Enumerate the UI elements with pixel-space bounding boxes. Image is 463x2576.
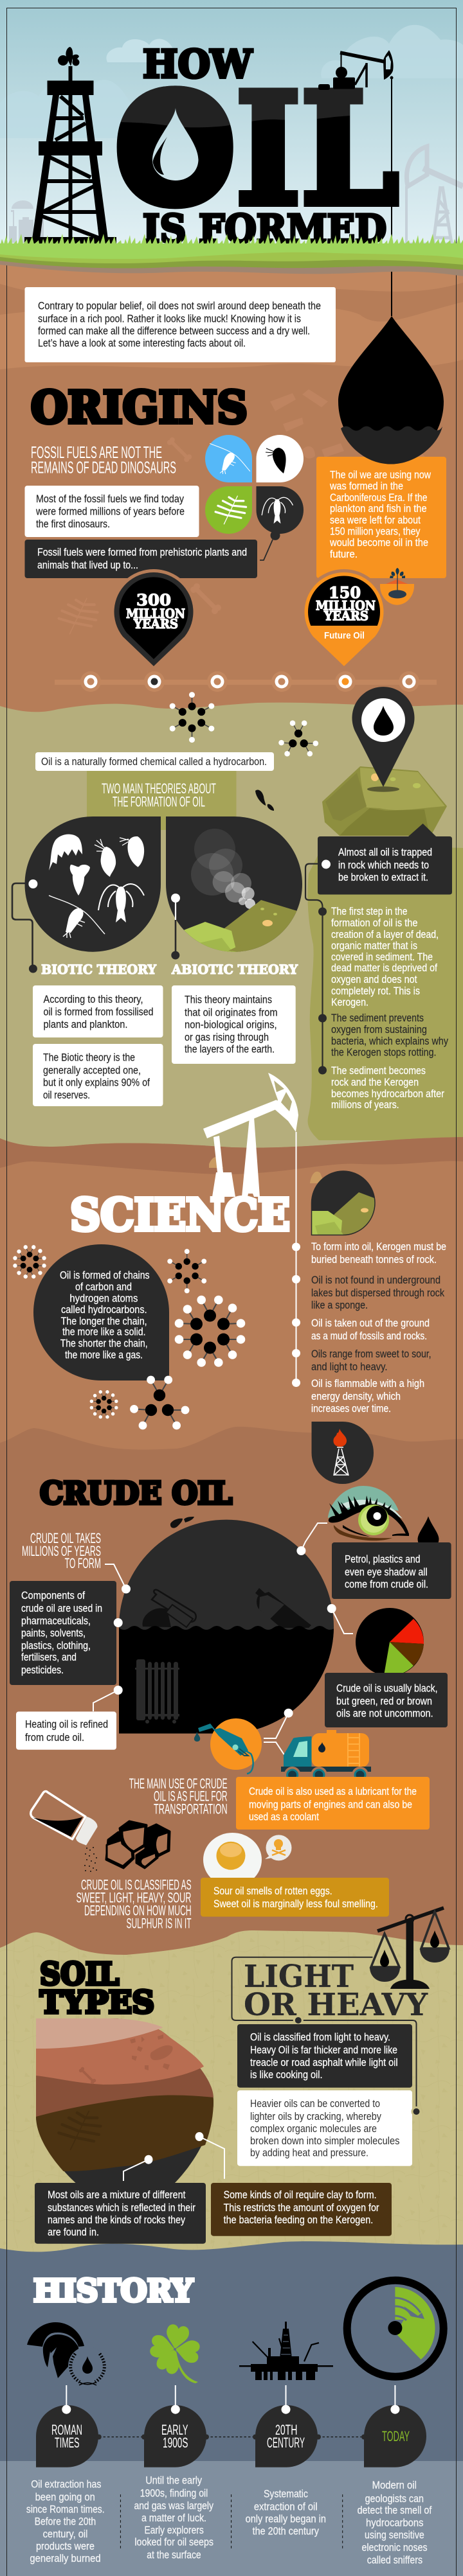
heading: crude oil classified: CRUDE OIL IS CLASSIFIED AS	[81, 1877, 192, 1892]
callout: trapped in rock	[318, 824, 452, 894]
heading: Science: SCIENCE	[70, 1190, 290, 1241]
text: 20th century	[246, 2489, 326, 2537]
heading band: two main theories: TWO MAIN THEORIES ABOUT	[102, 781, 216, 797]
icon: pump jack on title	[318, 50, 394, 316]
icon: large oil drop	[338, 316, 444, 464]
subheading: fossil fuels: FOSSIL FUELS ARE NOT THE	[31, 443, 162, 462]
panel: chains of carbon teardrop: The shorter the chain,	[60, 1338, 148, 1350]
panel: chains of carbon teardrop: Oil is formed of chains	[60, 1270, 150, 1282]
text: today: hydrocarbons	[366, 2518, 423, 2529]
timeline: million years	[55, 671, 437, 692]
text: today: geologists can	[365, 2493, 424, 2505]
icon: white pump jack	[203, 1073, 298, 1384]
pin: 300 million years: 300	[136, 591, 171, 609]
small rocks in soil	[209, 1157, 324, 1183]
connector dot: heading to box	[294, 2016, 302, 2025]
hydrocarbon callout: Oil is a naturally formed chemical called a hydrocarbon.	[41, 756, 267, 768]
panel: chains of carbon teardrop: hydrogen atoms	[69, 1293, 138, 1305]
subheading: fossil fuels	[31, 443, 176, 477]
subheading: fossil fuels: REMAINS OF DEAD DINOSAURS	[31, 458, 176, 477]
text box: biotic accepted: The Biotic theory is the	[43, 1052, 135, 1064]
panel: abiotic theory illustration	[166, 816, 304, 957]
icon: skull speech bubble	[265, 1835, 292, 1860]
text: early 1900s: and gas was largely	[134, 2500, 214, 2512]
connector: formation steps	[305, 860, 331, 1074]
background pump jack silhouette	[399, 146, 463, 244]
chart: soil layers drop	[36, 2018, 213, 2184]
pin: oil drop location	[352, 687, 415, 787]
panel: 20th century: 20TH	[275, 2422, 297, 2438]
icon: oil splash on crude	[170, 1517, 194, 1528]
heading band: two main theories	[87, 768, 237, 830]
connector: eye	[296, 1523, 327, 1555]
text box: biotic accepted: oil reserves.	[43, 1090, 90, 1101]
text box: light to heavy	[237, 2024, 412, 2088]
text box: cracking	[237, 2090, 412, 2166]
text: early 1900s: at the surface	[147, 2550, 201, 2561]
icon: radar	[347, 2280, 444, 2377]
heading: crude oil classified: DEPENDING ON HOW MUCH	[84, 1903, 192, 1919]
bracket line: light or heavy	[232, 1957, 417, 2112]
connector: mixture	[123, 2155, 153, 2181]
panel: chains of carbon teardrop: called hydrocarbons.	[61, 1304, 147, 1316]
panel: chains of carbon teardrop	[33, 1244, 169, 1381]
text box: components	[10, 1581, 116, 1685]
timeline: science facts: buried beneath tonnes of rock.	[311, 1254, 437, 1266]
timeline: science facts: Oil is flammable with a high	[311, 1378, 424, 1389]
panel: orange carboniferous note: was formed in the	[329, 481, 403, 492]
pin: 150 million years future oil	[304, 572, 383, 666]
text box: heating oil: from crude oil.	[25, 1732, 84, 1743]
text: today: detect the smell of	[358, 2505, 432, 2516]
text box: biotic accepted	[33, 1044, 163, 1106]
heading: main use: THE MAIN USE OF CRUDE	[129, 1776, 228, 1792]
text box: components: paints, solvents,	[21, 1628, 86, 1639]
text: formation steps: organic matter that is	[331, 940, 417, 952]
text box: sour oil: Sweet oil is marginally less foul smelling.	[213, 1898, 378, 1910]
panel: 20th century: CENTURY	[267, 2435, 305, 2451]
icon: flame rig teardrop	[311, 1422, 374, 1484]
text box: most fossil fuels: were formed millions of years before	[35, 506, 185, 518]
text: early 1900s	[134, 2475, 214, 2561]
panel: Roman times	[36, 2385, 98, 2467]
text: today: called sniffers	[367, 2555, 422, 2566]
text box: clay: the bacteria feeding on the Kerogen.	[224, 2214, 373, 2226]
connector: petals to box	[260, 531, 280, 560]
text box: light to heavy: treacle or road asphalt while light oil	[250, 2057, 398, 2069]
heading: crude oil takes millions: CRUDE OIL TAKES	[30, 1530, 101, 1546]
text box: prehistoric plants: Fossil fuels were formed from prehistoric plants and	[37, 547, 247, 558]
ground: grass layers	[0, 231, 463, 276]
text: formation steps: creation of a layer of dead,	[331, 929, 439, 940]
pin: 150 million years future oil: MILLION	[316, 598, 376, 613]
panel: orange carboniferous note: plankton and fish in the	[330, 503, 427, 515]
pin: 150 million years future oil: 150	[329, 583, 361, 602]
panel: chains of carbon teardrop: of carbon and	[75, 1282, 132, 1293]
heading: biotic and abiotic theory	[41, 962, 298, 977]
text box: light to heavy: is like cooking oil.	[250, 2069, 323, 2081]
text box: biotic theory: oil is formed from fossilised	[44, 1006, 153, 1018]
text box: most fossil fuels: the first dinosaurs.	[36, 518, 110, 530]
text: formation steps: Kerogen.	[331, 997, 368, 1009]
text: 20th century: the 20th century	[253, 2526, 320, 2537]
timeline connectors: history	[96, 2435, 367, 2440]
heading: light or heavy	[244, 1959, 428, 2023]
text: formation steps: The sediment becomes	[331, 1065, 426, 1077]
text: today: electronic noses	[361, 2542, 427, 2554]
text box: light to heavy: Heavy Oil is far thicker and more like	[250, 2045, 397, 2056]
intro text box: surface in a rich pool. Rather it looks like muck! Knowing how it is	[38, 313, 301, 324]
text: formation steps: dead matter is deprived of	[331, 962, 437, 974]
panel: orange carboniferous note: would become oil in the	[329, 537, 428, 549]
heading: light or heavy: LIGHT	[244, 1959, 354, 1995]
text: formation steps: bacteria, which explains why	[331, 1036, 449, 1047]
text: formation steps: millions of years.	[331, 1099, 399, 1111]
text box: most fossil fuels	[24, 486, 199, 537]
text: Roman times: since Roman times.	[26, 2504, 105, 2516]
heading: biotic and abiotic theory: BIOTIC THEORY	[41, 962, 157, 977]
text: early 1900s: looked for oil seeps	[134, 2537, 213, 2548]
text: formation steps: The sediment prevents	[331, 1012, 424, 1024]
text box: clay	[211, 2183, 392, 2236]
text: early 1900s: Until the early	[145, 2475, 203, 2487]
panel: early 1900s	[144, 2385, 206, 2467]
text box: crude colour	[325, 1673, 448, 1727]
icon: rock	[322, 766, 447, 836]
panel: 20th century	[255, 2385, 318, 2467]
text: Roman times: generally burned	[30, 2553, 101, 2564]
text: formation steps: covered in sediment. The	[331, 951, 433, 963]
heading: crude oil takes millions: MILLIONS OF YEARS	[22, 1543, 101, 1559]
intro text box: Let’s have a look at some interesting facts about oil.	[38, 338, 246, 349]
heading: light or heavy: OR HEAVY	[244, 1987, 428, 2023]
text box: petrol plastics: come from crude oil.	[345, 1579, 428, 1591]
icon: oil splash	[255, 790, 274, 811]
intro text box: Contrary to popular belief, oil does not swirl around deep beneath the	[38, 300, 321, 312]
text: Roman times	[26, 2479, 105, 2564]
text box: petrol plastics: Petrol, plastics and	[345, 1553, 421, 1565]
panel: early 1900s: 1900S	[163, 2435, 188, 2451]
chart: crude oil colour pie	[356, 1608, 424, 1676]
text box: biotic accepted: generally accepted one,	[43, 1065, 141, 1077]
timeline: science facts: Oil is not found in underground	[311, 1275, 440, 1286]
panel: orange carboniferous note: future.	[330, 549, 358, 560]
text box: biotic theory: According to this theory,	[44, 994, 143, 1005]
fossil decorations	[59, 389, 440, 634]
heading: Origins: ORIGINS	[31, 382, 248, 434]
panel: orange carboniferous note	[316, 457, 446, 578]
text: early 1900s: Early explorers	[144, 2525, 204, 2536]
text box: components: pesticides.	[21, 1664, 64, 1676]
connector: heating oil	[93, 1686, 123, 1711]
pin: 150 million years future oil: YEARS	[323, 609, 368, 623]
text box: cracking: Heavier oils can be converted to	[250, 2098, 380, 2110]
heading: Crude Oil: CRUDE OIL	[40, 1476, 232, 1512]
timeline: science facts: Oil is taken out of the ground	[311, 1318, 430, 1329]
text box: cracking: complex organic molecules are	[250, 2123, 377, 2135]
icon: tanker truck	[281, 1730, 371, 1783]
icon: offshore rig	[239, 2322, 333, 2380]
connector: abiotic	[171, 894, 180, 960]
text box: abiotic theory: or gas rising through	[185, 1032, 269, 1043]
text box: prehistoric plants	[24, 540, 257, 578]
connector: biotic	[12, 879, 37, 973]
connector: pie	[327, 1604, 353, 1634]
column dividers: history	[120, 2494, 343, 2548]
text: formation steps: becomes hydrocarbon after	[331, 1088, 444, 1100]
pin: 300 million years: YEARS	[133, 617, 178, 631]
text: today: Modern oil	[372, 2480, 417, 2491]
text box: mixture	[35, 2183, 206, 2244]
panel: chains of carbon teardrop: The longer the chain,	[61, 1316, 147, 1327]
text: formation steps: completely rot. This is	[331, 985, 420, 997]
text: today	[358, 2480, 432, 2566]
text: Roman times: products were	[36, 2541, 95, 2552]
text box: abiotic theory: the layers of the earth.	[185, 1044, 275, 1055]
title: How Oil Is Formed: OIL	[114, 60, 399, 240]
text box: lubricant	[236, 1777, 430, 1830]
text box: abiotic theory: This theory maintains	[185, 994, 272, 1006]
text: 20th century: only really began in	[246, 2514, 326, 2525]
text box: sour oil: Sour oil smells of rotten eggs.	[213, 1885, 332, 1897]
icon: roman helmet with wreath	[27, 2322, 107, 2385]
text box: light to heavy: Oil is classified from light to heavy.	[250, 2032, 390, 2043]
panel: orange carboniferous note: 150 million years, they	[330, 525, 421, 537]
text box: biotic theory	[33, 985, 163, 1037]
text box: cracking: by adding heat and pressure.	[250, 2148, 368, 2159]
title: How Oil Is Formed: HOW	[143, 42, 253, 87]
timeline: science facts: Oils range from sweet to sour,	[311, 1348, 431, 1360]
connector dot: components	[114, 1618, 123, 1627]
heading: History: HISTORY	[33, 2273, 194, 2309]
text box: petrol plastics: even eye shadow all	[345, 1566, 428, 1578]
molecule diagrams: hydrocarbon	[170, 692, 318, 757]
timeline: science facts: increases over time.	[311, 1403, 391, 1415]
timeline: science facts: energy density, which	[311, 1391, 401, 1402]
panel: chains of carbon teardrop: the more like a solid.	[62, 1327, 145, 1338]
text box: clay: This restricts the amount of oxygen for	[224, 2202, 379, 2214]
heading band: two main theories: THE FORMATION OF OIL	[113, 794, 205, 809]
intro text box: formed can make all the difference between success and a dry well.	[38, 325, 310, 337]
text box: cracking: lighter oils by cracking, whereby	[250, 2111, 382, 2122]
callout: trapped in rock: Almost all oil is trapped	[338, 847, 432, 858]
heading: main use	[129, 1776, 228, 1817]
text: formation steps: oxygen from sustaining	[331, 1024, 427, 1036]
panel: early 1900s: EARLY	[161, 2422, 188, 2438]
text: formation steps: The first step in the	[331, 906, 408, 917]
heading: crude oil classified: SULPHUR IS IN IT	[126, 1916, 192, 1932]
heading: biotic and abiotic theory: ABIOTIC THEORY	[171, 962, 298, 977]
text box: components: crude oil are used in	[21, 1603, 102, 1614]
panel: crude oil large teardrop	[119, 1520, 335, 1734]
icon: oil derrick	[24, 47, 116, 243]
text box: abiotic theory: that oil originates from	[185, 1007, 278, 1019]
icon: heater	[135, 1659, 179, 1724]
heading: soil types: TYPES	[40, 1985, 154, 2021]
text box: lubricant: moving parts of engines and can also be	[249, 1799, 412, 1810]
text box: mixture: substances which is reflected in their	[48, 2202, 195, 2214]
text box: clay: Some kinds of oil require clay to form.	[224, 2189, 377, 2201]
callout: trapped in rock: be broken to extract it.	[338, 872, 428, 883]
heading: crude oil takes millions: TO FORM	[65, 1555, 101, 1571]
title: How Oil Is Formed: IS FORMED	[143, 207, 386, 252]
panel: Roman times: ROMAN	[51, 2422, 82, 2438]
heading: main use: TRANSPORTATION	[154, 1801, 228, 1817]
text: early 1900s: 1900s, finding oil	[140, 2488, 208, 2500]
icons: plankton petals	[205, 435, 304, 534]
text box: crude colour: oils are not uncommon.	[336, 1707, 433, 1719]
text box: lubricant: used as a coolant	[249, 1812, 319, 1823]
text box: prehistoric plants: animals that lived up to...	[37, 560, 138, 571]
icon: petrol drop	[417, 1513, 440, 1549]
background factory silhouettes	[9, 200, 44, 243]
connector dot: cracking	[412, 2107, 421, 2116]
heading: crude oil takes millions	[22, 1530, 101, 1571]
text: Roman times: century, oil	[43, 2528, 87, 2540]
panel: biotic theory illustration	[24, 816, 161, 952]
connector: clay	[195, 2132, 224, 2179]
text box: components: plastics, clothing,	[21, 1640, 91, 1652]
text: formation steps: rock and the Kerogen	[331, 1077, 419, 1088]
text: Roman times: been going on	[35, 2492, 95, 2503]
panel: today	[364, 2385, 426, 2467]
icon: sugar cubes	[106, 1821, 170, 1868]
text box: sour oil	[201, 1878, 389, 1917]
hydrocarbon callout	[35, 752, 274, 771]
text box: abiotic theory	[172, 985, 296, 1064]
text: today: using sensitive	[365, 2530, 424, 2541]
text box: petrol plastics	[332, 1542, 451, 1599]
text box: cracking: broken down into simpler molecules	[250, 2135, 399, 2147]
text box: biotic accepted: but it only explains 90% of	[43, 1077, 150, 1089]
text box: most fossil fuels: Most of the fossil fuels we find today	[36, 493, 185, 505]
icon: egg	[203, 1833, 262, 1887]
heading: soil types	[40, 1957, 154, 2021]
text: Roman times: Before the 20th	[35, 2516, 96, 2528]
text box: abiotic theory: non-biological origins,	[185, 1019, 277, 1031]
text: 20th century: extraction of oil	[254, 2501, 318, 2513]
panel: Roman times: TIMES	[55, 2435, 80, 2451]
text box: components: pharmaceuticals,	[21, 1616, 91, 1627]
text: 20th century: Systematic	[264, 2489, 308, 2500]
panel: today: TODAY	[382, 2428, 410, 2444]
text: Roman times: Oil extraction has	[31, 2479, 102, 2491]
icon: balance scale	[370, 1908, 449, 1989]
text box: biotic theory: plants and plankton.	[44, 1019, 127, 1030]
heading: soil types: SOIL	[40, 1957, 119, 1993]
intro text box	[24, 287, 336, 362]
molecule diagrams: science	[13, 1245, 245, 1429]
icon: rock teardrop	[311, 1170, 376, 1236]
text: formation steps: oxygen and does not	[331, 974, 417, 985]
timeline: science facts: lakes but dispersed through rock	[311, 1287, 445, 1299]
text box: components: Components of	[21, 1590, 85, 1601]
timeline: science facts: like a sponge.	[311, 1300, 368, 1311]
icon: four leaf clover	[149, 2324, 201, 2383]
panel: orange carboniferous note: sea were left for about	[330, 515, 421, 526]
text box: lubricant: Crude oil is also used as a lubricant for the	[249, 1786, 417, 1797]
timeline: science facts: To form into oil, Kerogen must be	[311, 1241, 446, 1253]
text box: crude colour: Crude oil is usually black,	[336, 1682, 437, 1694]
timeline: science facts: and light to heavy.	[311, 1361, 387, 1373]
panel: chains of carbon teardrop: the more like a gas.	[65, 1350, 143, 1361]
text box: crude colour: but green, red or brown	[336, 1696, 432, 1707]
text box: mixture: are found in.	[48, 2227, 99, 2238]
text: formation steps: the Kerogen stops rotting.	[331, 1047, 436, 1059]
icon: salt shaker	[31, 1792, 98, 1872]
icon: eye with eye shadow	[328, 1486, 409, 1540]
icon: pill and bottle	[143, 1588, 311, 1628]
connector: transport	[264, 1709, 293, 1761]
text box: mixture: Most oils are a mixture of different	[48, 2189, 186, 2201]
icon: fuel pump nozzle	[194, 1718, 262, 1774]
heading: crude oil classified: SWEET, LIGHT, HEAVY, SOUR	[76, 1889, 192, 1905]
timeline: science facts	[292, 1241, 446, 1415]
text box: components: fertilisers, and	[21, 1652, 77, 1663]
callout: trapped in rock: in rock which needs to	[338, 860, 429, 871]
heading: crude oil classified	[76, 1877, 192, 1932]
text: formation steps: formation of oil is the	[331, 917, 418, 929]
text box: heating oil	[16, 1711, 116, 1750]
text: early 1900s: a matter of luck.	[141, 2512, 206, 2524]
heading: main use: OIL IS AS FUEL FOR	[154, 1788, 228, 1804]
pin: 300 million years: MILLION	[126, 606, 185, 621]
panel: orange carboniferous note: The oil we are using now	[330, 469, 431, 481]
pin: 300 million years	[114, 572, 193, 666]
connector: takes millions	[105, 1564, 131, 1593]
panel: orange carboniferous note: Carboniferous Era. If the	[330, 492, 427, 504]
text box: mixture: names and the kinds of rocks they	[48, 2214, 186, 2226]
text: formation steps	[331, 906, 449, 1111]
icon: future oil well	[380, 568, 414, 605]
timeline: science facts: as a mud of fossils and rocks.	[311, 1330, 427, 1342]
text box: heating oil: Heating oil is refined	[25, 1719, 108, 1731]
pin: 150 million years future oil: Future Oil	[324, 630, 365, 641]
